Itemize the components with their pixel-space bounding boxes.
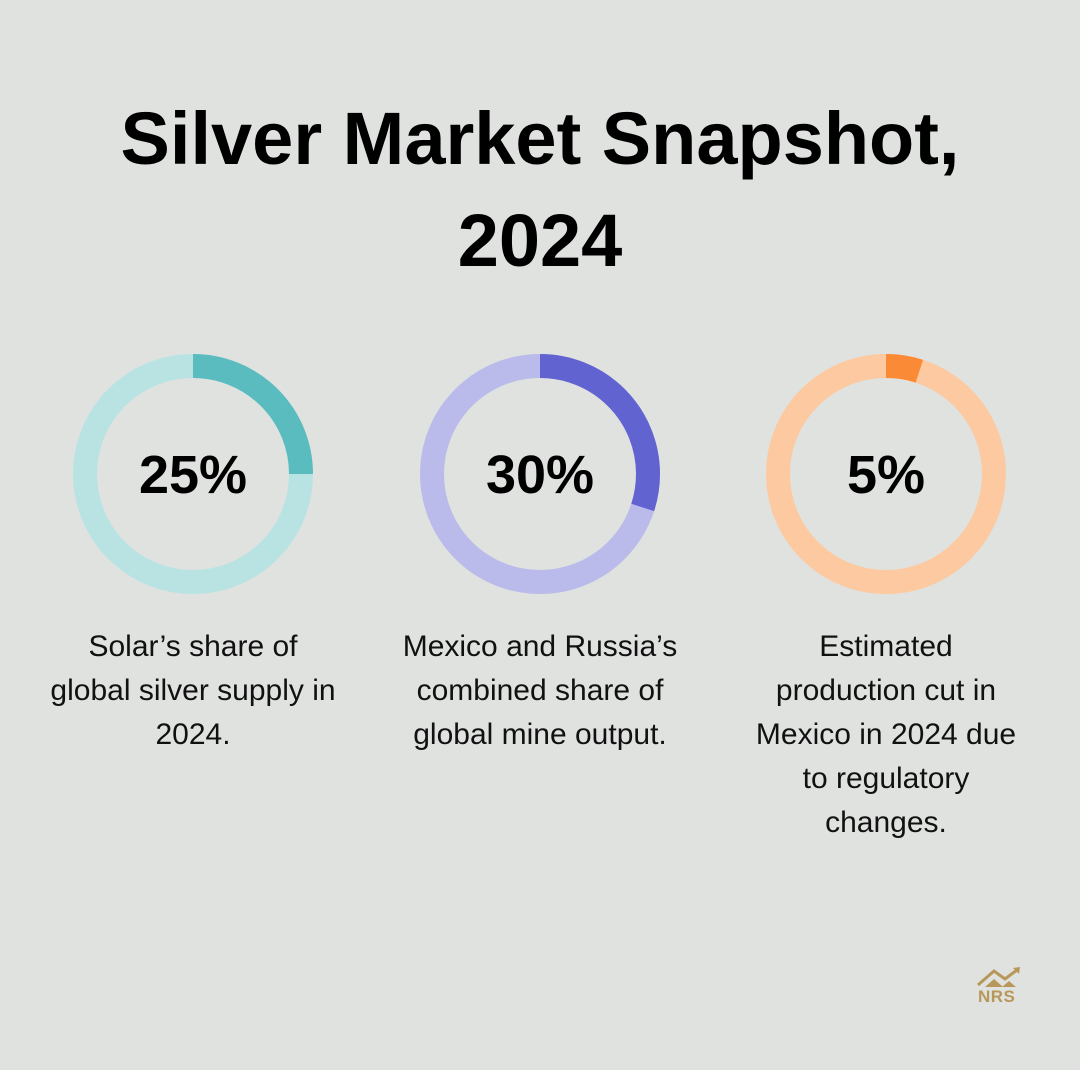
- caption 1: [50, 630, 336, 751]
- caption 3: changes.: [825, 806, 947, 839]
- caption 3: production cut in: [776, 674, 996, 707]
- logo: NRS: NRS: [978, 987, 1015, 1006]
- caption 1: Solar’s share of: [88, 630, 298, 663]
- title: 2024: [458, 199, 622, 282]
- donut: 25%: [85, 366, 301, 582]
- caption 3: Estimated: [819, 630, 953, 663]
- title: Silver Market Snapshot,: [121, 97, 959, 180]
- caption 3: [756, 630, 1016, 839]
- value 30%: 30%: [486, 445, 594, 505]
- caption 2: global mine output.: [413, 718, 667, 751]
- logo: NRS: [977, 967, 1020, 1006]
- donut: 5%: [778, 366, 994, 582]
- caption 1: global silver supply in: [50, 674, 336, 707]
- caption 3: to regulatory: [803, 762, 969, 795]
- caption 3: Mexico in 2024 due: [756, 718, 1016, 751]
- caption 2: Mexico and Russia’s: [403, 630, 677, 663]
- value 5%: 5%: [847, 445, 925, 505]
- caption 1: 2024.: [155, 718, 231, 751]
- caption 2: combined share of: [417, 674, 663, 707]
- value 25%: 25%: [139, 445, 247, 505]
- title: [121, 97, 959, 282]
- caption 2: [403, 630, 677, 751]
- donut: 30%: [432, 366, 648, 582]
